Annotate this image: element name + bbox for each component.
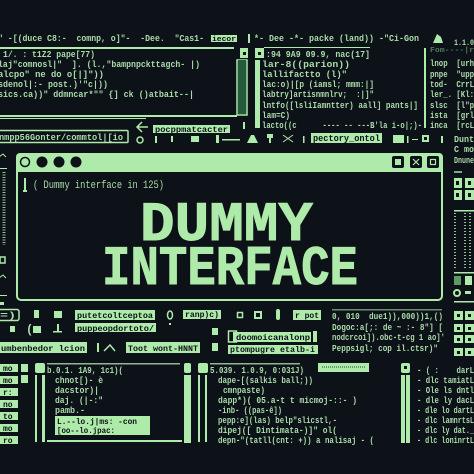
code panel: middle right: Dogoc:a[;: de ~ :- 8"] [ <box>332 323 443 333</box>
top menu bar left: " -[(duce C8:- comnp, o]"- -Dee. "Cas1- <box>0 34 204 44</box>
code panel: top left: alcpo" ne do o[|]")) <box>0 70 104 80</box>
code panel: bottom middle: -inb- ((pas-ê]) <box>218 406 282 416</box>
code panel: top right <box>424 47 474 131</box>
code panel: bottom left: chnot[)- è <box>55 376 103 386</box>
run button: ranp)c) <box>185 311 219 320</box>
top menu bar left: iecor <box>212 36 236 44</box>
top menu bar left <box>0 34 237 49</box>
code panel: top middle: labtry]artisnmnlrv; :|]" <box>262 90 374 100</box>
code panel: top middle: :94 9A9 09.9, nac(17] <box>266 50 370 60</box>
code panel: top middle <box>237 47 422 131</box>
code panel: top middle: lacto((c ---- -- ---B'la i-o|;)- <box>262 121 422 131</box>
label buttons lower row: Toot wont-HNNT <box>128 345 198 354</box>
label buttons lower row: umbenbedor lcion <box>1 345 85 354</box>
code panel: bottom middle: pepp:e](las) belp"slicstl,- <box>218 416 337 426</box>
button cluster centre right: r pot <box>295 312 319 321</box>
side text right <box>454 135 474 166</box>
top menu bar right: *- Dee -*- packe (land)) -"Ci-Gon <box>254 34 419 44</box>
code panel: bottom middle: depn-"(tatll(cnt: +)) a nalisaj - ( <box>218 436 374 446</box>
address box: nmpp56Gonter/commtol|[io <box>0 133 123 143</box>
code panel: middle right <box>332 309 445 354</box>
code panel: bottom middle: 5.039. 1.0.9, 0:031J) <box>210 366 304 376</box>
code panel: top middle: lar-8((parion)) <box>262 60 350 70</box>
code panel: top middle: lac:o)|[p (iamsl; mmm:|] <box>262 80 374 90</box>
list: bottom right <box>417 366 474 446</box>
main window <box>16 153 443 301</box>
title: INTERFACE <box>102 237 358 301</box>
code panel: bottom middle: cmnpaste) <box>223 386 265 396</box>
list column bottom left: r: <box>3 389 13 398</box>
code panel: top left: sics.ca))" ddmncar*"" {] ck ()atbait--| <box>0 90 194 100</box>
button cluster centre right: doomoicanalonp <box>236 334 310 343</box>
code panel: bottom middle: dipej([ Dintimata-)]" ol( <box>218 426 337 436</box>
label buttons centre left <box>75 310 156 334</box>
toolbar right icons <box>393 135 443 143</box>
list column bottom left <box>0 364 28 446</box>
run button <box>168 310 221 351</box>
code panel: top left: 1/. : t1Z2 pape[77) <box>3 50 95 60</box>
label buttons centre left: putetcoltceptoa <box>77 312 153 321</box>
button cluster centre right <box>228 309 321 355</box>
progress box <box>318 363 369 372</box>
label buttons centre left: puppeopdortoto/ <box>77 325 154 334</box>
label: factory tab: pectory_ontol <box>313 134 381 144</box>
code panel: top left: sdenol|:- post.)'"c|)) <box>0 80 108 90</box>
code panel: top middle: lallifactto (l)" <box>262 70 347 80</box>
code panel: bottom left <box>35 363 191 443</box>
left edge strip <box>0 154 7 305</box>
code panel: bottom middle <box>198 363 374 446</box>
code panel: top middle: lam=C) <box>262 111 290 121</box>
label buttons lower row <box>0 342 200 354</box>
toolbar row below window left <box>0 310 62 337</box>
toolbar middle icons <box>237 134 304 143</box>
toolbar row below window left: ( <box>26 323 33 337</box>
code panel: top left <box>0 50 200 100</box>
window controls right <box>392 156 439 168</box>
code panel: middle right: 0, 010 due1)),000))1,() <box>332 312 443 322</box>
code panel: top middle: lntfo([lsliIamntter) aall] pants|] <box>262 101 418 111</box>
title <box>102 193 358 301</box>
code panel: bottom left: [oo--lo.jpac: <box>57 427 115 436</box>
code panel: middle right: Peppsigl; cop il.ctsr)" <box>332 344 438 354</box>
code panel: bottom left: L.--lo.j|ms: -con <box>57 418 137 427</box>
toolbar left <box>137 135 237 143</box>
button grid right <box>454 311 474 356</box>
code panel: middle right: nodcrcoi]).obc-t-cg 1 ao]' <box>332 333 445 343</box>
code panel: bottom left: pamb.- <box>55 406 85 416</box>
button cluster centre right: ptompugre etalb-i <box>230 346 315 355</box>
code panel: bottom left: b.0.1. 1A9, 1c1)( <box>47 366 123 376</box>
code panel: bottom middle: dapp*)( 05.a-t t micmoj-::- ) <box>218 396 357 406</box>
label: highlighted tab: pocppmatcacter <box>155 126 228 135</box>
toolbar row below window left: =) <box>0 311 16 321</box>
code panel: bottom left: daj. (|-:" <box>55 396 103 406</box>
title: DUMMY <box>140 193 313 257</box>
code panel: bottom middle: dape-[(salkis ball;)) <box>218 376 313 386</box>
side panel right <box>454 171 474 302</box>
code panel: top left: laj"comnosl|" ]. (l.,"bampnpckttagch- |) <box>0 60 200 70</box>
list column bottom left: to <box>3 413 13 422</box>
icon: back arrow <box>137 122 148 132</box>
scrollbar <box>401 363 410 443</box>
prompt text: ( Dummy interface in 125) <box>33 180 164 192</box>
window title bar <box>16 153 443 172</box>
code panel: top right: Fom----|r <box>430 47 474 55</box>
code panel: bottom left: dacstor)| <box>55 386 99 396</box>
top menu bar right <box>248 34 474 48</box>
list column bottom left: no <box>3 401 13 410</box>
divider lines <box>0 115 237 119</box>
window controls left <box>20 156 82 168</box>
list column bottom left: mo <box>3 365 13 374</box>
list column bottom left: mo <box>3 425 13 434</box>
list column bottom left: mo <box>3 377 13 386</box>
list column bottom left: ro <box>3 437 13 446</box>
